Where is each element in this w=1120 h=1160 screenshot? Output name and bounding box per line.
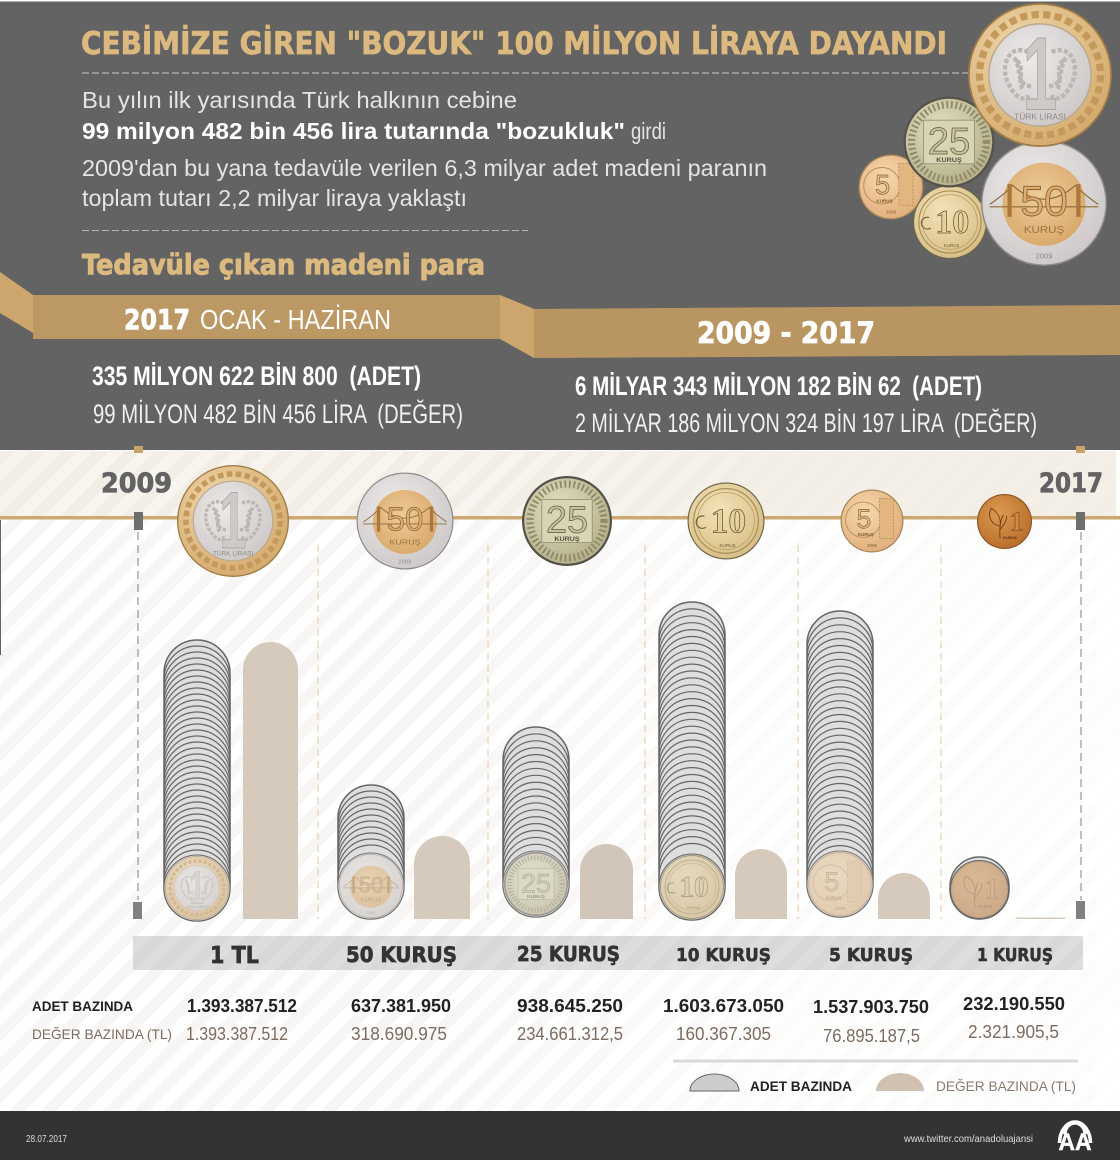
chart: 10 kuruş coin stack: [659, 602, 725, 920]
chart: 25 kuruş value bar: [580, 844, 633, 919]
row coin: 1 kuruş: [977, 494, 1032, 549]
adet values: 938.645.250: [517, 996, 623, 1016]
header coins: [858, 3, 1112, 266]
değer values: 234.661.312,5: [517, 1024, 623, 1044]
label: 50 kuruş: 50 KURUŞ: [346, 943, 457, 967]
coin: 1 lira: [968, 3, 1112, 147]
chart: 25 kuruş coin stack: [503, 727, 569, 917]
stats 2017: 335 MİLYON 622 BİN 800 (ADET): [92, 361, 421, 391]
adet values: 232.190.550: [963, 994, 1065, 1014]
chart: 1 TL value bar: [243, 642, 298, 919]
data table: [32, 994, 1065, 1046]
label: 1 kuruş: 1 KURUŞ: [977, 945, 1053, 966]
ribbon label: 2017: OCAK - HAZİRAN: [200, 304, 391, 335]
legend: [690, 1073, 1076, 1094]
row coins: [177, 465, 1032, 577]
coin: 50 kuruş: [981, 140, 1107, 266]
row coin: 10 kuruş: [688, 482, 764, 560]
legend icon: adet: [690, 1074, 739, 1091]
row coin: 50 kuruş: [356, 472, 454, 570]
coin: 5 kuruş: [858, 154, 924, 220]
stats 2017: 99 MİLYON 482 BİN 456 LİRA (DEĞER): [93, 398, 463, 429]
chart: 1 TL coin stack: [164, 640, 230, 921]
logo: AA: AA: [1058, 1129, 1092, 1156]
değer values: [186, 1022, 1059, 1046]
row coin: 5 kuruş: [840, 490, 904, 552]
chart: 50 kuruş coin stack: [338, 785, 404, 919]
page background: [0, 450, 580, 1111]
category bar: [133, 936, 1083, 970]
legend label: adet: ADET BAZINDA: [750, 1078, 852, 1094]
subheading: Tedavüle çıkan madeni para: [82, 248, 485, 281]
chart: 10 kuruş value bar: [735, 849, 787, 919]
intro text: [82, 87, 767, 211]
stats 2009-2017: 6 MİLYAR 343 MİLYON 182 BİN 62 (ADET): [575, 371, 982, 401]
chart: 5 kuruş coin stack: [807, 611, 873, 917]
adet values: 1.393.387.512: [187, 996, 297, 1016]
chart: 1 kuruş value bar: [1016, 918, 1065, 919]
timeline markers: [133, 446, 1085, 919]
adet values: [187, 994, 1065, 1017]
değer values: 160.367.305: [676, 1024, 771, 1044]
twitter address: www.twitter.com/anadoluajansi: [903, 1133, 1033, 1145]
chart: 1 kuruş coin stack: [950, 857, 1009, 919]
row heading: değer: DEĞER BAZINDA (TL): [32, 1026, 172, 1042]
ribbon label: 2017: [124, 303, 391, 336]
row heading: adet: ADET BAZINDA: [32, 998, 133, 1014]
ribbon: [0, 272, 1120, 358]
değer values: 76.895.187,5: [823, 1026, 920, 1046]
değer values: 2.321.905,5: [968, 1022, 1059, 1042]
label: 5 kuruş: 5 KURUŞ: [829, 945, 913, 966]
row coin: 25 kuruş: [522, 476, 612, 566]
intro text: 2009'dan bu yana tedavüle verilen 6,3 milyar adet madeni paranın: [82, 155, 767, 181]
adet values: 637.381.950: [351, 996, 451, 1016]
row coin: 1 lira: [177, 465, 289, 577]
değer values: 1.393.387.512: [186, 1024, 288, 1044]
stats 2009-2017: [575, 371, 1037, 438]
ribbon label: 2009-2017: 2009 - 2017: [697, 316, 875, 350]
intro text: girdi: [631, 118, 666, 144]
year 2009: 2009: [101, 468, 172, 499]
intro text: Bu yılın ilk yarısında Türk halkının cebine: [82, 87, 517, 113]
değer values: 318.690.975: [351, 1024, 447, 1044]
ribbon label: 2017: 2017: [124, 303, 190, 336]
label: 10 kuruş: 10 KURUŞ: [676, 945, 771, 966]
timeline band: [0, 451, 1120, 655]
coin: 25 kuruş: [904, 96, 994, 188]
date: 28.07.2017: [26, 1134, 67, 1145]
adet values: 1.603.673.050: [663, 996, 784, 1016]
label: 1 TL: 1 TL: [210, 943, 259, 969]
intro text: toplam tutarı 2,2 milyar liraya yaklaştı: [82, 185, 467, 211]
legend label: değer: DEĞER BAZINDA (TL): [936, 1078, 1076, 1094]
intro text: 99 milyon 482 bin 456 lira tutarında "bozukluk": [82, 118, 625, 144]
title: CEBİMİZE GİREN "BOZUK" 100 MİLYON LİRAYA DAYANDI: [81, 26, 947, 62]
adet values: 1.537.903.750: [813, 997, 929, 1017]
chart: 50 kuruş value bar: [414, 836, 470, 919]
label: 25 kuruş: 25 KURUŞ: [517, 942, 620, 966]
footer: [0, 1111, 1120, 1160]
chart: 5 kuruş value bar: [878, 873, 930, 919]
header panel: [0, 2, 1120, 450]
legend icon: değer: [876, 1073, 924, 1091]
year 2017: 2017: [1039, 468, 1103, 499]
coin: 10 kuruş: [913, 185, 987, 259]
stats 2017: [92, 361, 463, 429]
